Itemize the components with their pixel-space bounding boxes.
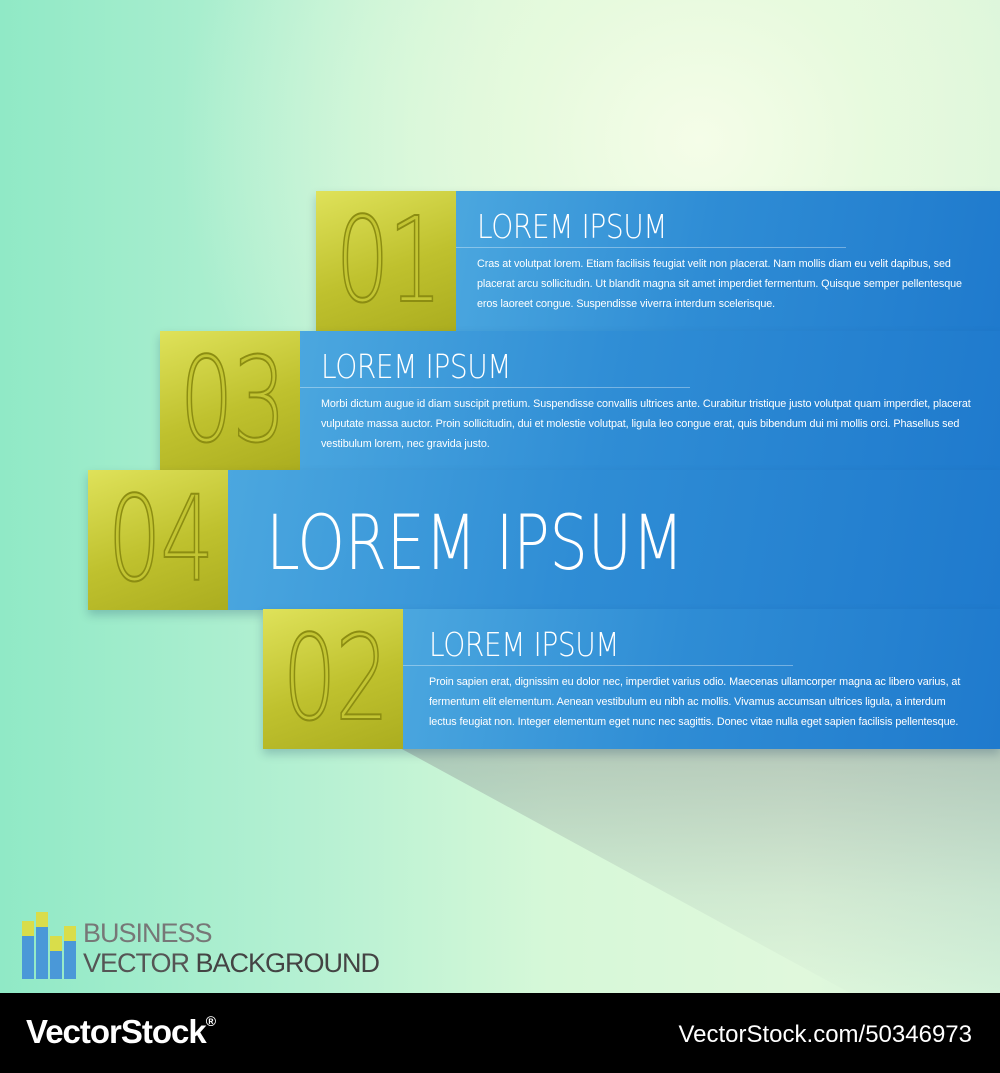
blue bar 03 [300, 331, 1000, 471]
row 02 [263, 609, 1000, 749]
blue bar 01: LOREM IPSUM [477, 207, 667, 246]
blue bar 02 [403, 609, 1000, 749]
blue bar 03: Morbi dictum augue id diam suscipit pretium. Suspendisse convallis ultrices ante. Curabitur tristique justo volutpat quam imperdiet, placerat vulputate massa auctor. Proin sollicitudin, dui et molestie volutpat, ligula leo congue erat, quis bibendum dui mi mollis orci. Phasellus sed vestibulum lorem, nec gravida justo. [321, 398, 971, 450]
blue bar 02: LOREM IPSUM [429, 625, 619, 664]
row 03 [160, 331, 1000, 471]
number box 03: 03 [180, 331, 285, 469]
blue bar 04 [228, 470, 1000, 610]
blue bar 01: Cras at volutpat lorem. Etiam facilisis feugiat velit non placerat. Nam mollis diam eu velit dapibus, sed placerat arcu sollicitudin. Ut blandit magna sit amet imperdiet fermentum. Quisque semper pellentesque eros laoreet congue. Suspendisse viverra interdum scelerisque. [477, 258, 962, 310]
footer brand: VectorStock® [26, 1013, 215, 1050]
footer [0, 993, 1000, 1073]
number box 04: 04 [108, 470, 213, 608]
blue bar 01 [456, 191, 1000, 331]
number box 01: 01 [336, 191, 441, 329]
logo [22, 912, 379, 979]
blue bar 02: Proin sapien erat, dignissim eu dolor nec, imperdiet varius odio. Maecenas ullamcorper magna ac libero varius, at fermentum elit elementum. Aenean vestibulum eu nibh ac mollis. Vivamus accumsan ultrices ligula, a interdum lectus feugiat non. Integer elementum eget nunc nec sagittis. Donec vitae nulla eget sapien facilisis pellentesque. [429, 676, 960, 728]
logo text: BUSINESS [83, 918, 212, 948]
number box 02: 02 [283, 609, 388, 747]
footer id: VectorStock.com/50346973 [678, 1021, 972, 1048]
row 01 [316, 191, 1000, 331]
logo text: VECTOR BACKGROUND [83, 948, 379, 978]
blue bar 03: LOREM IPSUM [321, 347, 511, 386]
row 04 [88, 470, 1000, 610]
logo text [83, 918, 379, 978]
blue bar 04: LOREM IPSUM [266, 498, 684, 587]
icon: bar chart [22, 912, 76, 979]
